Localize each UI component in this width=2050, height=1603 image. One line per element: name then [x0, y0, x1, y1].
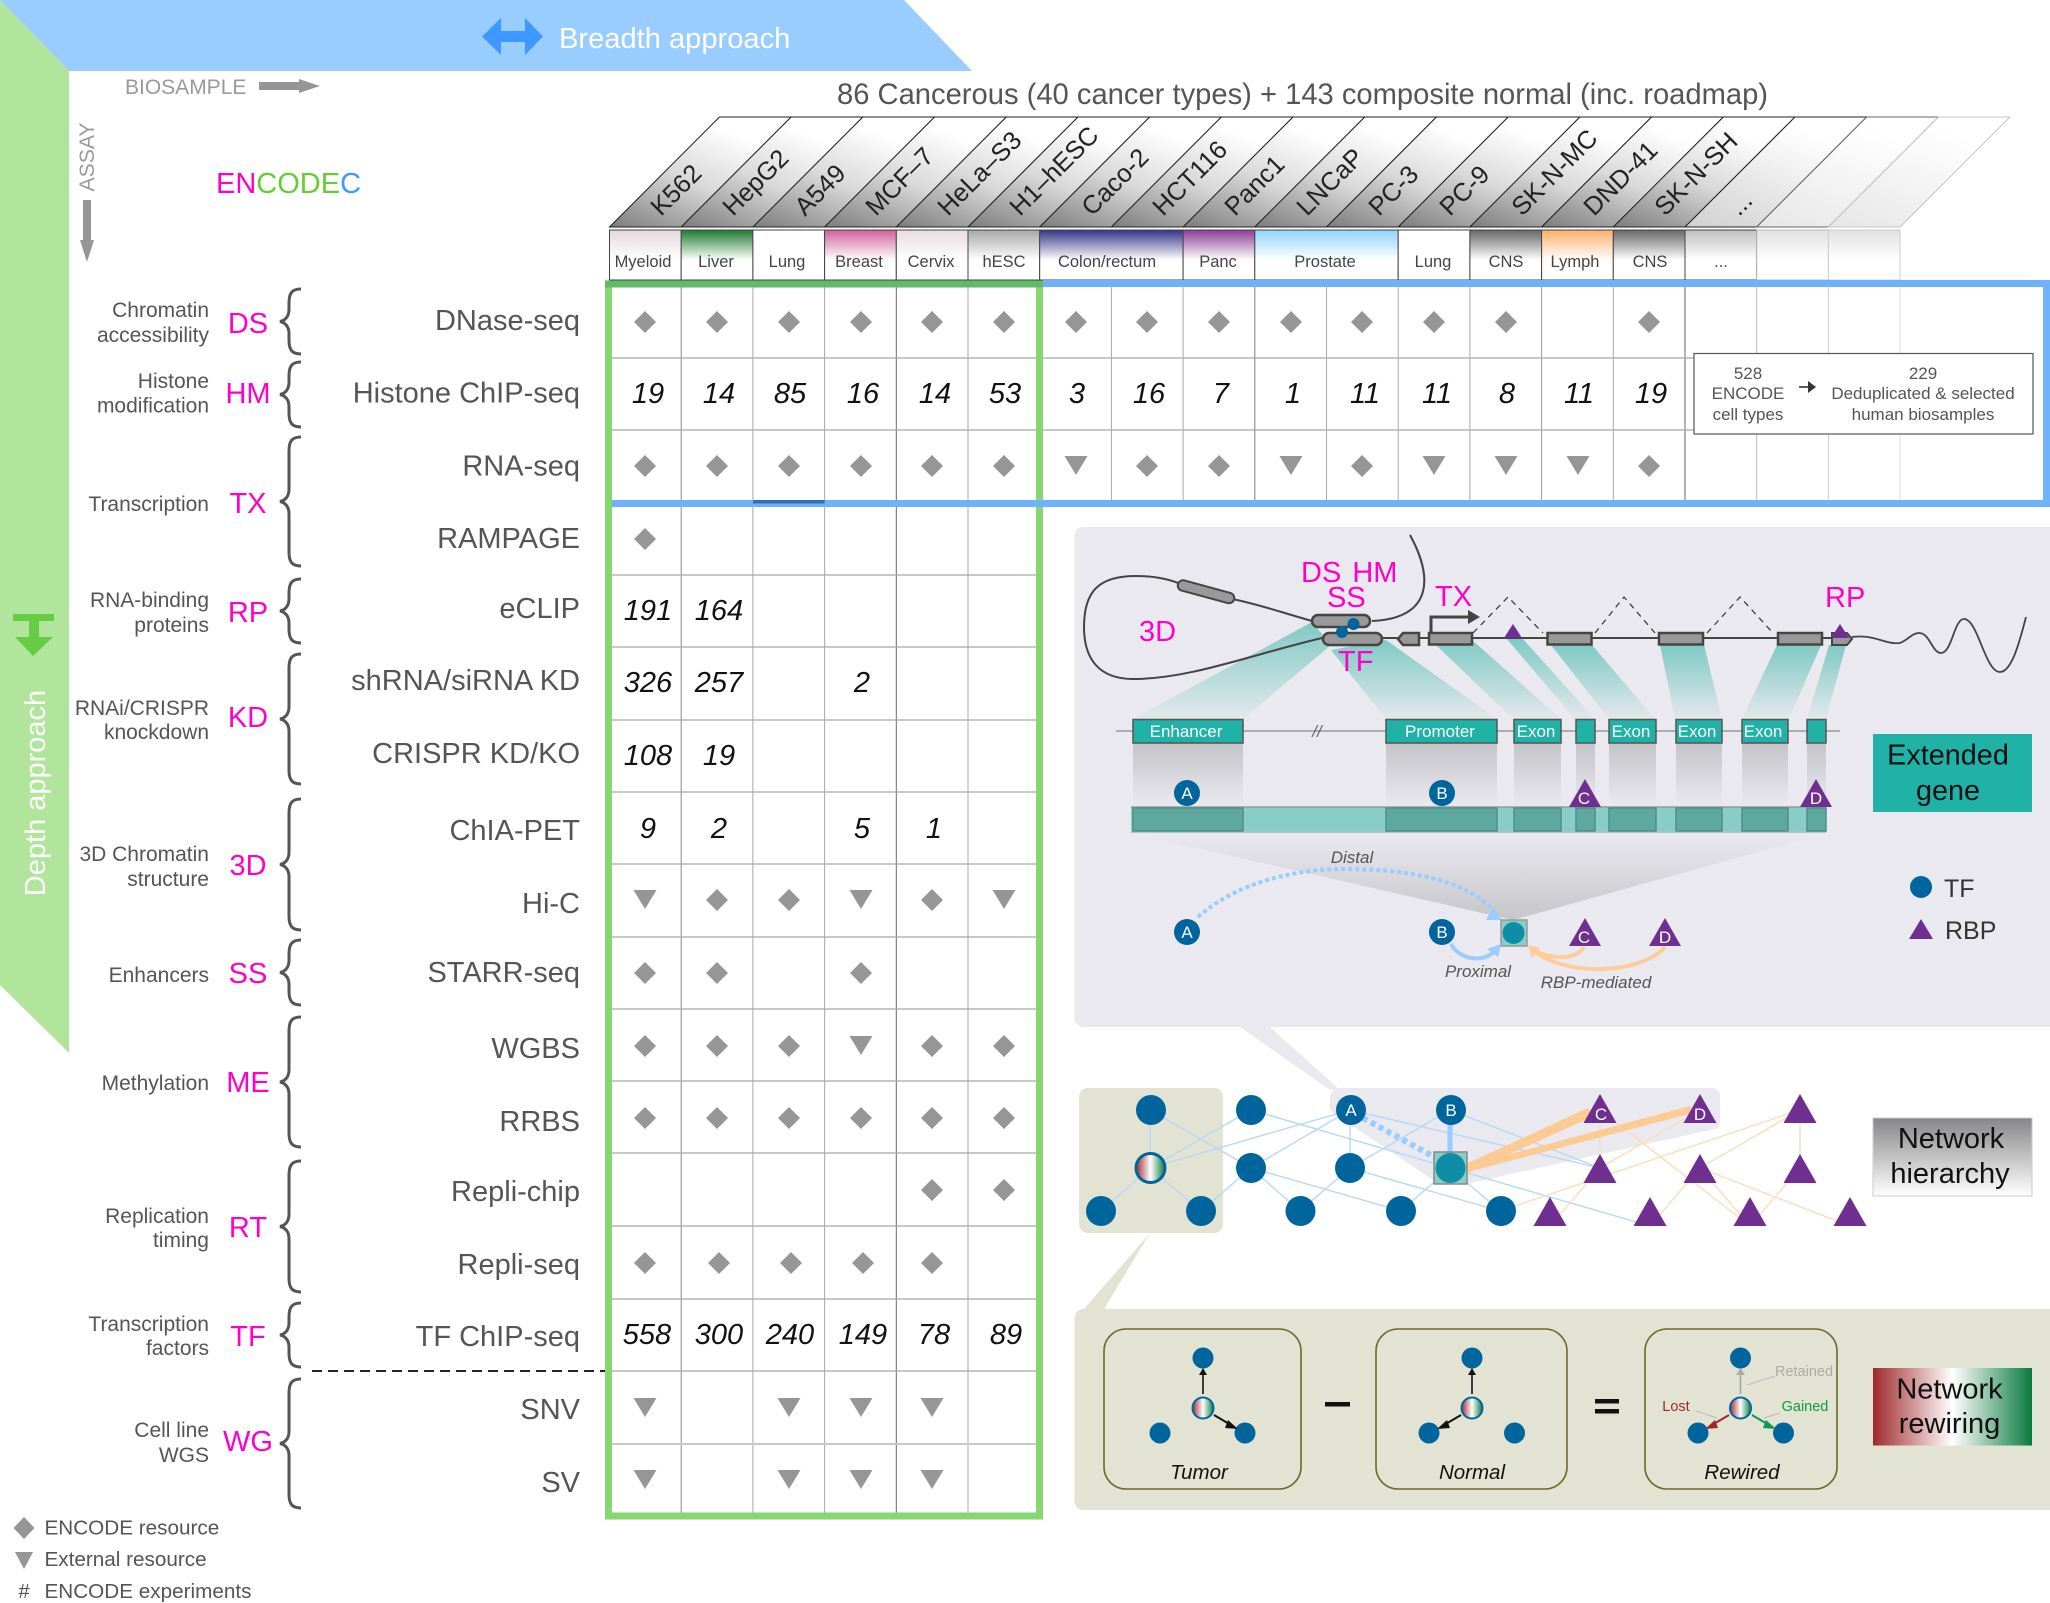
assay labels [351, 305, 581, 1499]
assay labels: STARR-seq [427, 957, 580, 989]
row: Repli-chip [921, 1179, 1015, 1201]
cell line header: ... [1723, 186, 1758, 221]
normal network [1376, 1329, 1567, 1489]
assay annotations on locus: SS [1327, 582, 1366, 614]
node letters: B [1445, 1101, 1457, 1120]
cell line header: HCT116 [1147, 136, 1233, 221]
target gene regulators [1174, 848, 1681, 992]
row: SV [634, 1470, 944, 1489]
category labels: Methylation [102, 1072, 209, 1095]
TF nodes [1086, 1095, 1516, 1226]
label: network rewiring: rewiring [1899, 1408, 2000, 1440]
category labels: WGS [159, 1444, 209, 1467]
regulator positions on extended gene: D [1810, 789, 1822, 808]
frame: depth (green) [605, 284, 1043, 1516]
assay labels: Hi-C [522, 888, 580, 920]
row: TF ChIP-seq: 78 [918, 1319, 950, 1351]
operator: minus [1325, 1402, 1350, 1406]
row: Histone ChIP-seq: 85 [774, 378, 807, 410]
operator: equals [1595, 1399, 1619, 1414]
tissue header [610, 230, 1900, 280]
gene track: Exon [1678, 722, 1716, 741]
cell line header: H1–hESC [1004, 121, 1104, 221]
row: ChIA-PET [640, 813, 942, 845]
cell line header: K562 [645, 159, 707, 221]
rewired network: Rewired [1704, 1461, 1780, 1484]
tumor network: Tumor [1170, 1461, 1229, 1484]
regulator positions on extended gene [1131, 779, 1832, 832]
row: TF ChIP-seq: 558 [623, 1319, 671, 1351]
assay abbreviations: 3D [229, 850, 267, 882]
node letters [1345, 1101, 1706, 1124]
category labels: knockdown [104, 721, 209, 744]
label: network hierarchy: hierarchy [1890, 1158, 2010, 1190]
assay labels: SV [541, 1467, 581, 1499]
target gene regulators: Proximal [1445, 962, 1512, 981]
assay abbreviations: RT [229, 1212, 267, 1244]
assay abbreviations: WG [223, 1426, 273, 1458]
cell line header: SK-N-MC [1506, 124, 1603, 221]
title: ENCODEC: ENCODEC [216, 168, 361, 200]
callout: cell type deduplication: human biosamples [1852, 405, 1994, 424]
category braces [280, 289, 301, 1508]
breadth approach label: Breadth approach [559, 23, 790, 55]
assay labels: eCLIP [499, 593, 580, 625]
assay axis [76, 122, 99, 262]
assay labels: CRISPR KD/KO [372, 738, 580, 770]
row: RNA-seq [634, 455, 1660, 477]
target gene regulators: B [1436, 923, 1448, 942]
label: network rewiring: Network [1896, 1374, 2003, 1406]
category labels: RNAi/CRISPR [75, 697, 209, 720]
category labels: Cell line [134, 1419, 209, 1442]
assay annotations on locus: TX [1435, 581, 1472, 613]
tissue header: Cervix [908, 253, 955, 271]
rewired network [1645, 1329, 1837, 1489]
target gene regulators: D [1659, 928, 1671, 947]
highlighted target gene node [1363, 1106, 1693, 1184]
cell line header: LNCaP [1291, 143, 1369, 221]
cell line header: Panc1 [1219, 150, 1290, 221]
category labels: RNA-binding [90, 589, 209, 612]
legend: markers: External resource [44, 1548, 207, 1571]
callout: cell type deduplication: Deduplicated & selected [1831, 384, 2015, 403]
convergence cone [1131, 833, 1826, 920]
category labels: timing [153, 1229, 209, 1252]
depth approach band [0, 0, 69, 1053]
tissue header: CNS [1633, 253, 1667, 271]
category labels: Replication [105, 1205, 209, 1228]
row: Histone ChIP-seq: 19 [1635, 378, 1667, 410]
rewired network: Retained [1775, 1364, 1833, 1380]
tumor network [1104, 1329, 1301, 1489]
DNA looping locus [1084, 535, 2026, 679]
row: eCLIP: 164 [695, 595, 743, 627]
callout: cell type deduplication: cell types [1713, 405, 1783, 424]
legend: markers: ENCODE resource [44, 1516, 219, 1540]
target gene regulators: RBP-mediated [1541, 973, 1652, 992]
node letters: A [1345, 1101, 1357, 1120]
tissue header: CNS [1489, 253, 1523, 271]
regulator positions on extended gene: C [1578, 789, 1590, 808]
row: TF ChIP-seq: 240 [765, 1319, 814, 1351]
tissue header: Lymph [1551, 253, 1599, 271]
category labels: proteins [134, 614, 209, 637]
cell line header: HeLa–S3 [932, 126, 1027, 221]
assay abbreviations: KD [228, 702, 268, 734]
cell line header: PC-3 [1363, 160, 1424, 221]
assay labels: Histone ChIP-seq [353, 378, 580, 410]
normal network: Normal [1439, 1461, 1506, 1484]
funnels from locus to gene blocks [1133, 622, 1846, 719]
assay annotations on locus [1139, 557, 1865, 678]
data matrix grid [609, 286, 1900, 1513]
legend: TF and RBP [1909, 875, 1996, 945]
assay annotations on locus: TF [1338, 646, 1373, 678]
row: ChIA-PET: 5 [854, 813, 871, 845]
dashed separator [312, 1370, 605, 1372]
assay abbreviations: DS [228, 308, 268, 340]
panel: network hierarchy [1079, 1088, 2032, 1233]
pointer: network to rewiring [1084, 1233, 1150, 1309]
cell line header: PC-9 [1434, 160, 1495, 221]
row: Histone ChIP-seq: 11 [1422, 378, 1452, 410]
legend: TF and RBP: TF [1944, 875, 1975, 903]
rewired hub node [1136, 1154, 1165, 1182]
tissue header: Liver [698, 253, 734, 271]
row: TF ChIP-seq: 149 [839, 1319, 887, 1351]
tissue header: Panc [1199, 253, 1237, 271]
row: Hi-C [634, 889, 1016, 911]
category labels: modification [97, 394, 209, 418]
RBP nodes [1534, 1094, 1866, 1226]
matrix markers and counts [623, 311, 1667, 1489]
gene track: // [1311, 722, 1324, 741]
cell line header: A549 [789, 159, 851, 221]
icon: breadth arrow [482, 18, 543, 55]
label: network rewiring [1873, 1368, 2032, 1446]
row: Histone ChIP-seq: 11 [1350, 378, 1380, 410]
category labels: accessibility [97, 324, 209, 347]
assay annotations on locus: RP [1825, 582, 1865, 614]
category labels: Histone [138, 370, 209, 393]
assay labels: Repli-chip [451, 1176, 580, 1208]
row: DNase-seq [634, 311, 1660, 333]
cell line header: MCF–7 [860, 142, 939, 221]
category labels: Chromatin [112, 299, 209, 322]
assay abbreviations: TX [229, 488, 267, 520]
assay labels: DNase-seq [435, 305, 580, 337]
category labels: Enhancers [109, 964, 209, 987]
category labels: structure [127, 868, 209, 891]
network edges: RBP [1500, 1110, 1850, 1226]
panel: extended gene [1074, 527, 2050, 1027]
biosample axis [125, 76, 320, 99]
assay labels: RNA-seq [462, 450, 580, 482]
category labels: Transcription [88, 1313, 209, 1336]
category labels: Transcription [88, 493, 209, 516]
row: STARR-seq [634, 962, 872, 984]
row: shRNA/siRNA KD [624, 667, 870, 699]
regulator positions on extended gene: A [1181, 784, 1193, 803]
row: Histone ChIP-seq: 19 [632, 378, 664, 410]
tissue header: Breast [835, 253, 883, 271]
zoom background: extended gene [1330, 1088, 1720, 1184]
cell line header: DND-41 [1578, 136, 1663, 221]
cell line header: SK-N-SH [1649, 127, 1743, 221]
row: CRISPR KD/KO: 19 [703, 740, 735, 772]
assay labels: Repli-seq [458, 1249, 580, 1281]
target gene regulators: A [1181, 923, 1193, 942]
row: Repli-seq [634, 1252, 943, 1274]
gene track [1116, 720, 1840, 806]
callout: cell type deduplication: ENCODE [1712, 384, 1784, 403]
assay annotations on locus: 3D [1139, 616, 1176, 648]
row: eCLIP [624, 595, 743, 627]
row: Histone ChIP-seq: 16 [847, 378, 880, 410]
node letters: D [1694, 1105, 1706, 1124]
depth approach label: Depth approach [20, 690, 52, 896]
zoom background: rewiring [1079, 1088, 1223, 1233]
row: TF ChIP-seq [623, 1319, 1022, 1351]
row: TF ChIP-seq: 89 [990, 1319, 1022, 1351]
category labels [75, 299, 209, 1467]
tissue header: Prostate [1294, 253, 1356, 271]
assay labels: RAMPAGE [437, 523, 580, 555]
assay abbreviations [223, 308, 273, 1458]
assay annotations on locus: DS HM [1301, 557, 1397, 589]
row: ChIA-PET: 2 [710, 813, 727, 845]
assay labels: SNV [520, 1394, 581, 1426]
label: network hierarchy [1873, 1118, 2032, 1196]
gene track: Promoter [1405, 722, 1475, 741]
pointer: gene to network [1240, 1027, 1340, 1090]
category labels: factors [146, 1337, 209, 1360]
row: shRNA/siRNA KD: 2 [853, 667, 870, 699]
row: Histone ChIP-seq: 1 [1285, 378, 1301, 410]
assay abbreviations: HM [225, 378, 271, 410]
row: SNV [634, 1398, 944, 1417]
row: CRISPR KD/KO: 108 [624, 740, 672, 772]
callout: cell type deduplication [1694, 354, 2033, 434]
rewired network: Gained [1782, 1399, 1828, 1415]
assay abbreviations: RP [228, 597, 268, 629]
cell line header [610, 117, 2010, 227]
row: Histone ChIP-seq: 16 [1133, 378, 1166, 410]
row: RRBS [634, 1107, 1015, 1129]
label: extended gene [1873, 734, 2032, 812]
row: Histone ChIP-seq [632, 378, 1667, 410]
breadth approach band [0, 0, 972, 71]
assay abbreviations: SS [229, 958, 267, 990]
label: extended gene: Extended [1887, 740, 2009, 772]
assay abbreviations: ME [226, 1067, 270, 1099]
row: Histone ChIP-seq: 8 [1499, 378, 1515, 410]
row: CRISPR KD/KO [624, 740, 735, 772]
target gene regulators: Distal [1331, 848, 1374, 867]
row: WGBS [634, 1035, 1015, 1057]
row: RAMPAGE [634, 528, 656, 550]
tissue header: Lung [1415, 253, 1451, 271]
tissue header: ... [1714, 253, 1728, 271]
assay labels: WGBS [491, 1033, 580, 1065]
row: TF ChIP-seq: 300 [695, 1319, 743, 1351]
regulator positions on extended gene: B [1436, 784, 1448, 803]
legend: markers [14, 1516, 251, 1603]
network edges: TF [1101, 1110, 1650, 1226]
tissue header: hESC [982, 253, 1026, 271]
assay labels: TF ChIP-seq [416, 1321, 580, 1353]
label: network hierarchy: Network [1898, 1123, 2005, 1155]
gene track: Enhancer [1150, 722, 1223, 741]
label: extended gene: gene [1916, 775, 1980, 807]
assay labels: shRNA/siRNA KD [351, 665, 580, 697]
tissue header: Colon/rectum [1058, 253, 1156, 271]
row: Histone ChIP-seq: 7 [1213, 378, 1231, 410]
row: Histone ChIP-seq: 14 [919, 378, 951, 410]
category labels: 3D Chromatin [79, 843, 209, 866]
node letters: C [1595, 1105, 1607, 1124]
row: eCLIP: 191 [624, 595, 672, 627]
cell line header: Caco-2 [1076, 143, 1154, 221]
frame: breadth (blue) [612, 284, 2046, 504]
callout: cell type deduplication: 229 [1909, 364, 1937, 383]
row: Histone ChIP-seq: 53 [989, 378, 1021, 410]
legend: markers: # [18, 1581, 30, 1603]
row: shRNA/siRNA KD: 257 [694, 667, 745, 699]
row: ChIA-PET: 9 [640, 813, 656, 845]
legend: markers: ENCODE experiments [44, 1580, 251, 1603]
biosample axis: BIOSAMPLE [125, 76, 246, 99]
row: Histone ChIP-seq: 11 [1564, 378, 1594, 410]
gene track: Exon [1744, 722, 1782, 741]
tissue header: Myeloid [615, 253, 671, 271]
gene track: Exon [1517, 722, 1555, 741]
tissue header: Lung [769, 253, 805, 271]
rewired network: Lost [1662, 1399, 1690, 1415]
assay abbreviations: TF [230, 1321, 266, 1353]
callout: cell type deduplication: 528 [1734, 364, 1762, 383]
icon: depth arrow [13, 614, 54, 656]
row: ChIA-PET: 1 [926, 813, 942, 845]
heading: biosample count: 86 Cancerous (40 cancer types) + 143 composite normal (inc. roadmap) [837, 79, 1768, 111]
assay axis: ASSAY [76, 122, 99, 192]
gene track: Exon [1612, 722, 1650, 741]
assay labels: RRBS [499, 1106, 580, 1138]
panel: network rewiring [1074, 1309, 2050, 1510]
row: Histone ChIP-seq: 14 [703, 378, 735, 410]
row: Histone ChIP-seq: 3 [1069, 378, 1085, 410]
assay labels: ChIA-PET [449, 815, 580, 847]
cell line header: HepG2 [717, 144, 794, 221]
icon: arrow [1799, 381, 1816, 393]
legend: TF and RBP: RBP [1945, 917, 1996, 945]
row: shRNA/siRNA KD: 326 [624, 667, 673, 699]
target gene regulators: C [1578, 928, 1590, 947]
